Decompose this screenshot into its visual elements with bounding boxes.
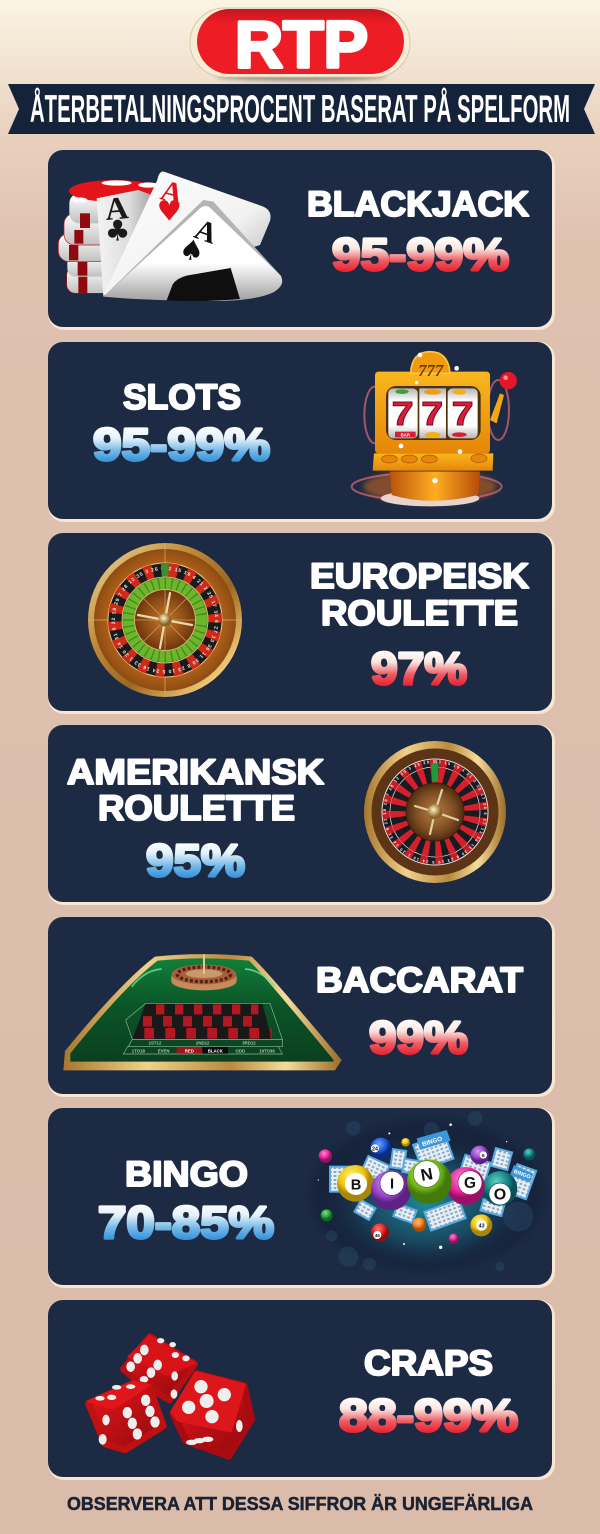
- panel: american roulette: [48, 725, 555, 905]
- label: slots: SLOTS: [123, 378, 241, 417]
- betting grid: ODD: [236, 1048, 245, 1053]
- betting grid: 1TO18: [132, 1048, 145, 1053]
- icon: cards and chips: [58, 172, 282, 301]
- label: europeisk roulette: EUROPEISK: [310, 557, 529, 596]
- betting grid: [123, 1003, 282, 1054]
- bingo tickets: [330, 1133, 536, 1231]
- value: baccarat: 99%: [369, 1012, 468, 1063]
- betting grid: EVEN: [158, 1048, 170, 1053]
- back die: [123, 1336, 195, 1400]
- RTP badge: [190, 7, 410, 81]
- label: blackjack: BLACKJACK: [307, 185, 529, 224]
- icon: slot machine: 7: [392, 396, 414, 433]
- big balls: [337, 1159, 517, 1210]
- value: slots: 95-99%: [93, 419, 270, 470]
- panel: baccarat: [48, 917, 555, 1097]
- icon: slot machine: 7: [452, 396, 474, 433]
- betting grid: RED: [185, 1048, 194, 1053]
- label: europeisk roulette: ROULETTE: [321, 594, 518, 633]
- label: bingo: BINGO: [125, 1155, 248, 1194]
- icon: american roulette wheel: [364, 741, 506, 883]
- label: baccarat: BACCARAT: [316, 961, 523, 1000]
- label: amerikansk roulette: ROULETTE: [98, 789, 295, 828]
- icon: slot machine: [352, 352, 517, 506]
- value: craps: 88-99%: [339, 1390, 518, 1441]
- panel: blackjack: [48, 150, 555, 330]
- label: amerikansk roulette: AMERIKANSK: [67, 753, 324, 792]
- card: ace of hearts: ♥: [157, 194, 182, 227]
- label: amerikansk roulette: [67, 753, 324, 828]
- big balls: B: [351, 1177, 361, 1193]
- card: ace of hearts: [103, 172, 271, 296]
- RTP badge: RTP: [235, 7, 368, 81]
- label: europeisk roulette: [310, 557, 529, 633]
- card: ace of clubs: A: [104, 189, 130, 227]
- panel: craps: [48, 1300, 555, 1480]
- panel: slots: [48, 342, 555, 522]
- icon: bingo balls: BINGO: [513, 1169, 531, 1181]
- betting grid: BLACK: [208, 1048, 224, 1053]
- panel: european roulette: [48, 533, 555, 714]
- icon: slot machine: 7: [421, 396, 443, 433]
- small balls: [319, 1138, 535, 1244]
- icon: european roulette wheel: 32 15 19 4 21 2 25 17 34 6 27 13 36 11 30 8 23 10 5 24 16 33 1 20 14 31 9 22 18 29 7 28 12 35 3 26 0: [112, 566, 218, 674]
- card: ace of clubs: ♣: [105, 214, 131, 248]
- icon: bingo balls: [310, 1111, 543, 1273]
- icon: slot machine: BAR: [401, 432, 411, 437]
- icon: dice: [88, 1336, 251, 1456]
- icon: american roulette wheel: 33 15 19 4 21 2 25 17 34 6 27 13 36 11 30 8 23 10 5 24 16 1 20 14 31 9 22 18 29 7 28 12 35 3 26 28 0: [383, 760, 487, 864]
- panel: bingo: [48, 1108, 555, 1288]
- card: ace of hearts: A: [157, 174, 186, 211]
- card: ace of spades: ♠: [177, 232, 207, 269]
- betting grid: 19TO36: [259, 1048, 275, 1053]
- icon: slot machine: 777: [418, 361, 444, 380]
- footnote: OBSERVERA ATT DESSA SIFFROR ÄR UNGEFÄRLIGA: [67, 1493, 533, 1514]
- left die: [88, 1382, 163, 1450]
- big balls: N: [419, 1164, 434, 1185]
- small balls: 46: [375, 1233, 380, 1238]
- card: ace of spades: A: [190, 213, 221, 251]
- betting grid: 1ST12: [149, 1041, 162, 1046]
- big balls: G: [464, 1175, 476, 1192]
- big balls: O: [494, 1187, 506, 1204]
- icon: bingo balls: BINGO: [421, 1135, 443, 1148]
- right die: [173, 1373, 251, 1456]
- betting grid: 3RD12: [242, 1041, 256, 1046]
- icon: european roulette wheel: [88, 543, 242, 697]
- value: blackjack: 95-99%: [332, 229, 509, 280]
- big balls: I: [390, 1177, 394, 1193]
- card: ace of spades: [103, 200, 282, 301]
- value: european roulette: 97%: [371, 643, 467, 694]
- card: ace of clubs: [97, 189, 152, 297]
- small balls: 43: [479, 1223, 485, 1229]
- betting grid: 2ND12: [196, 1041, 210, 1046]
- small balls: 6: [482, 1153, 485, 1159]
- label: craps: CRAPS: [364, 1344, 493, 1383]
- icon: casino table: [63, 954, 342, 1070]
- value: american roulette: 95%: [146, 835, 245, 886]
- roulette wheel on table: [171, 954, 237, 990]
- value: bingo: 70-85%: [98, 1197, 274, 1248]
- small balls: 24: [372, 1146, 378, 1152]
